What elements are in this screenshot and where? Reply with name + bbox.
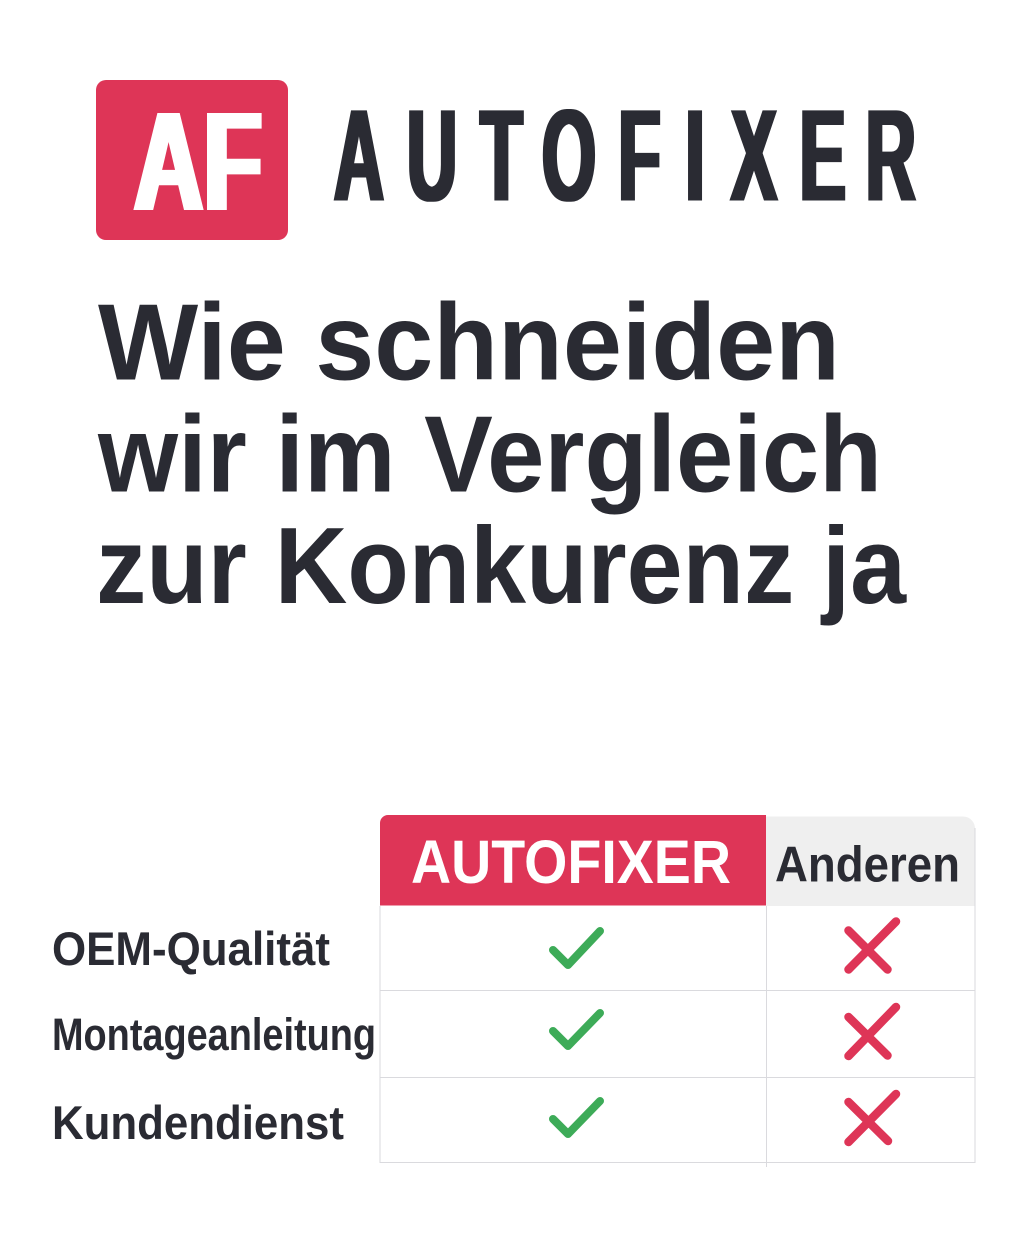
row labels: Montageanleitung [52,1009,376,1060]
row labels: Kundendienst [52,1096,344,1149]
logo wordmark: AUTOFIXER [334,83,916,229]
icons: green check marks [553,931,600,1134]
header: Anderen [766,816,975,906]
header: AUTOFIXER [380,815,766,906]
title: wir im Vergleich [97,394,882,516]
row labels: OEM-Qualität [52,922,330,975]
header: Anderen: Anderen [775,836,960,892]
logo icon: AF badge [96,80,288,240]
title: Wie schneiden [98,282,840,404]
icons: red crosses [848,922,896,1142]
row labels [52,922,376,1149]
comparison table [52,815,975,1167]
header: AUTOFIXER: AUTOFIXER [411,828,731,896]
title: zur Konkurenz ja [96,505,907,627]
title [96,282,907,627]
logo icon: AF badge: AF [134,83,262,240]
